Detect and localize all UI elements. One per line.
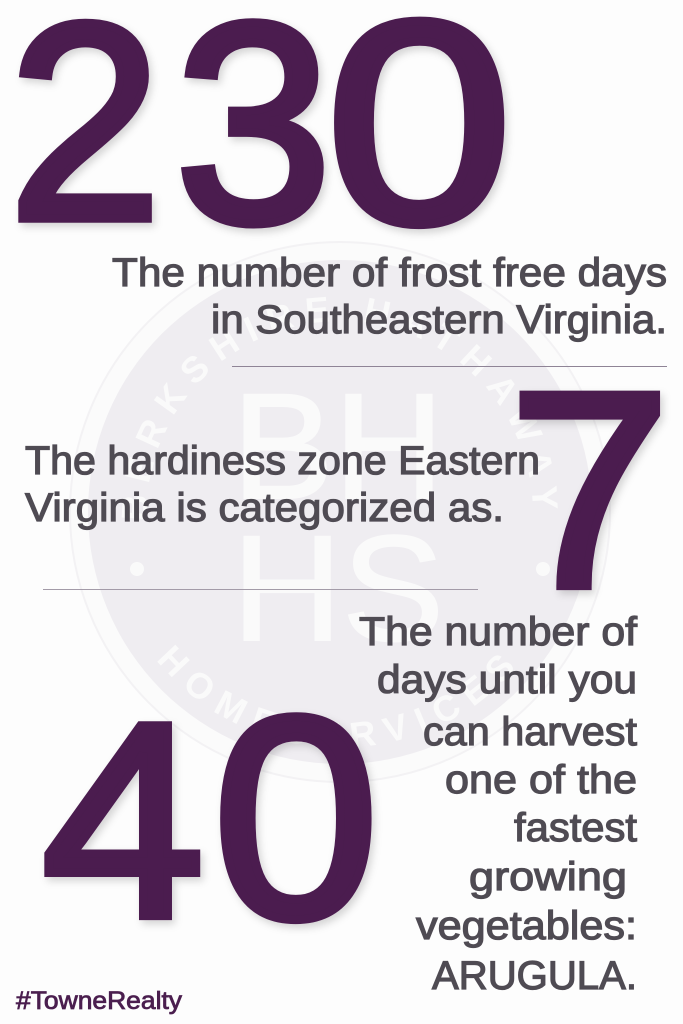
caption: days until harvest: days until you xyxy=(377,658,637,702)
big number 40: 4 xyxy=(42,666,204,975)
caption: days until harvest: The number of xyxy=(359,610,638,654)
caption: hardiness zone: The hardiness zone Eastern xyxy=(25,439,540,483)
caption: frost free days: in Southeastern Virginia. xyxy=(211,298,667,342)
caption: days until harvest: can harvest xyxy=(423,710,637,754)
big number 7: 7 xyxy=(509,335,670,646)
caption: hardiness zone: Virginia is categorized as. xyxy=(25,486,504,530)
watermark logo: HOMESERVICES xyxy=(158,645,513,747)
big number 40 xyxy=(42,657,379,978)
big number 230 xyxy=(9,0,512,284)
big number 40: 0 xyxy=(213,657,379,978)
watermark logo: BH xyxy=(232,362,444,530)
watermark logo xyxy=(69,241,611,782)
caption: days until harvest xyxy=(359,610,638,998)
caption: days until harvest: one of the xyxy=(445,758,637,802)
divider 2 xyxy=(43,589,478,590)
caption: hardiness zone xyxy=(25,439,540,530)
caption: frost free days: The number of frost free days xyxy=(112,251,667,295)
hashtag: #TowneRealty xyxy=(16,987,183,1015)
caption: frost free days xyxy=(112,251,667,342)
caption: days until harvest: ARUGULA. xyxy=(432,954,637,998)
caption: days until harvest: fastest xyxy=(514,806,637,850)
divider 1 xyxy=(232,366,667,367)
caption: days until harvest: growing xyxy=(469,855,627,899)
caption: days until harvest: vegetables: xyxy=(416,904,637,948)
watermark logo: BERKSHIRE HATHAWAY xyxy=(122,297,558,518)
watermark logo: HS xyxy=(232,504,444,672)
